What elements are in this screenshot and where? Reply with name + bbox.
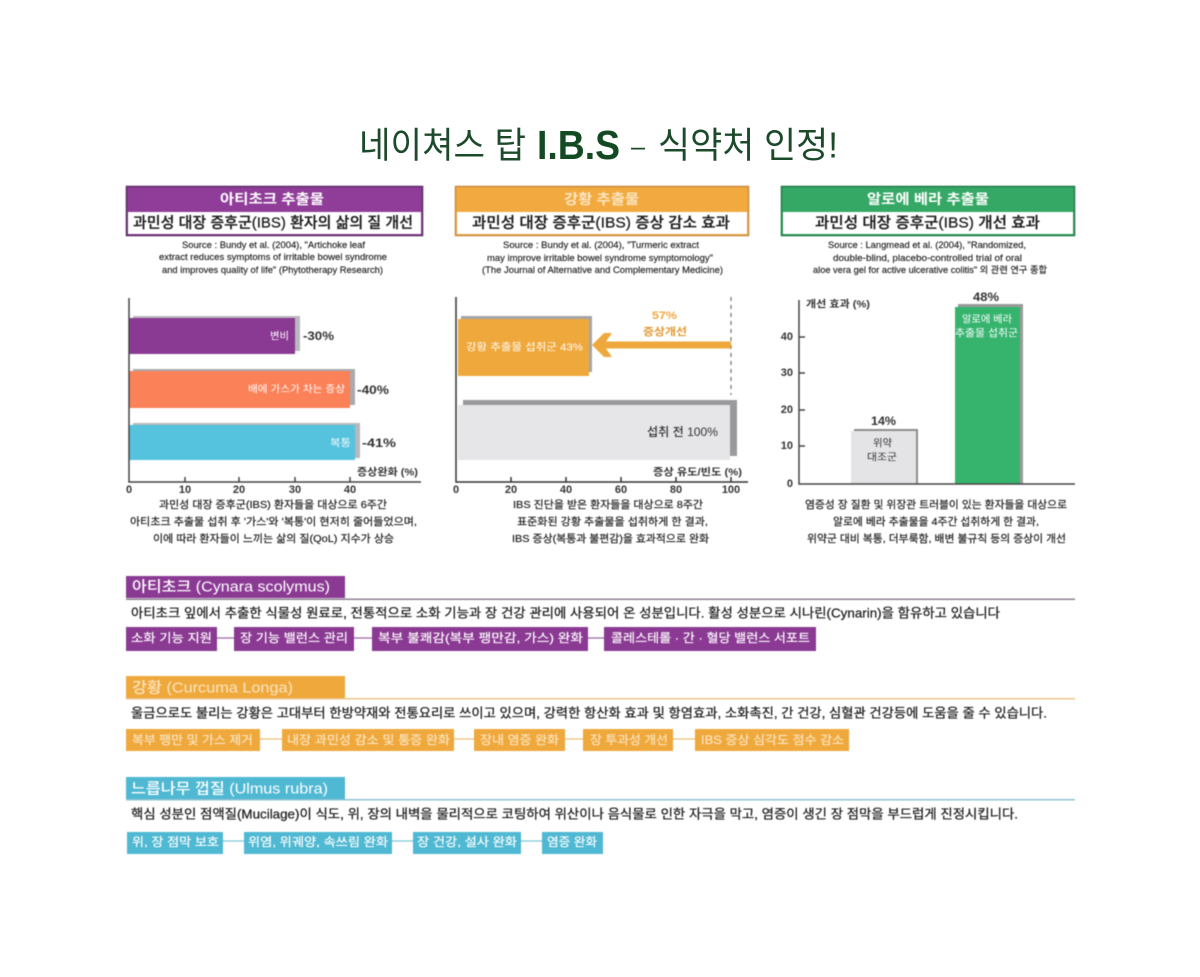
benefit tags: 장 건강, 설사 완화 bbox=[417, 835, 517, 849]
panel header: turmeric bbox=[456, 186, 748, 236]
chart caption: 이에 따라 환자들이 느끼는 삶의 질(QoL) 지수가 상승 bbox=[153, 533, 394, 545]
section heading: turmeric: 강황 (Curcuma Longa) bbox=[132, 680, 293, 696]
chart caption: 알로에 베라 추출물을 4주간 섭취하게 한 결과, bbox=[833, 515, 1039, 528]
benefit tags bbox=[126, 729, 849, 751]
source citation bbox=[159, 240, 387, 275]
bar chart: improvement effect: 0 bbox=[787, 478, 793, 490]
bar chart: symptom frequency: 40 bbox=[560, 484, 572, 496]
chart caption bbox=[805, 498, 1067, 545]
bar chart: symptom frequency: 증상 유도/빈도 (%) bbox=[653, 466, 742, 478]
bar chart: symptom frequency: 60 bbox=[615, 484, 627, 496]
bar chart: symptom frequency: 증상개선 bbox=[643, 325, 687, 338]
source citation: Source : Bundy et al. (2004), "Artichoke leaf bbox=[182, 240, 366, 250]
chart caption: IBS 증상(복통과 불편감)을 효과적으로 완화 bbox=[512, 532, 709, 545]
chart caption: 염증성 장 질환 및 위장관 트러블이 있는 환자들을 대상으로 bbox=[805, 498, 1067, 511]
panel: aloe vera study bbox=[781, 186, 1075, 545]
section heading: artichoke: 아티초크 (Cynara scolymus) bbox=[132, 578, 330, 596]
bar chart: improvement effect: 14% bbox=[871, 414, 896, 428]
panel: turmeric study bbox=[453, 186, 748, 545]
arrow: 57% reduction bbox=[592, 333, 731, 357]
benefit tags: 염증 완화 bbox=[547, 835, 597, 849]
bar chart: improvement effect: 위약 bbox=[873, 436, 892, 450]
bar chart: symptom relief: 30 bbox=[289, 484, 301, 496]
bar chart: symptom frequency: 강황 추출물 섭취군 43% bbox=[466, 342, 583, 354]
section heading: slippery elm: 느릅나무 껍질 (Ulmus rubra) bbox=[131, 780, 328, 798]
description: 핵심 성분인 점액질(Mucilage)이 식도, 위, 장의 내벽을 물리적으로 코팅하여 위산이나 음식물로 인한 자극을 막고, 염증이 생긴 장 점막을 부드럽게 진정시킵니다. bbox=[131, 806, 1018, 822]
benefit tags: 위염, 위궤양, 속쓰림 완화 bbox=[248, 835, 388, 849]
chart caption: 위약군 대비 복통, 더부룩함, 배변 불규칙 등의 증상이 개선 bbox=[807, 532, 1066, 545]
panel header: aloe vera: 과민성 대장 증후군(IBS) 개선 효과 bbox=[815, 214, 1040, 232]
chart caption: 과민성 대장 증후군(IBS) 환자들을 대상으로 6주간 bbox=[159, 499, 387, 511]
benefit tags bbox=[127, 832, 603, 854]
bar chart: symptom relief: -30% bbox=[303, 329, 334, 343]
section: slippery elm ingredient bbox=[126, 777, 1075, 854]
benefit tags: 복부 불쾌감(복부 팽만감, 가스) 완화 bbox=[378, 631, 583, 645]
chart caption: 아티초크 추출물 섭취 후 '가스'와 '복통'이 현저히 줄어들었으며, bbox=[130, 516, 417, 528]
bar chart: symptom relief: -41% bbox=[362, 436, 396, 450]
bar chart: symptom frequency: 80 bbox=[670, 484, 682, 496]
bar chart: improvement effect: 48% bbox=[973, 290, 999, 304]
title: I.B.S bbox=[537, 122, 620, 168]
bar chart: symptom relief: -40% bbox=[357, 383, 389, 397]
bar chart: symptom relief bbox=[126, 298, 421, 496]
bar chart: improvement effect: 40 bbox=[781, 331, 793, 343]
bar chart: symptom relief: 20 bbox=[233, 484, 245, 496]
chart caption bbox=[130, 499, 417, 545]
benefit tags: 위, 장 점막 보호 bbox=[132, 835, 219, 849]
panel header: artichoke: 과민성 대장 증후군(IBS) 환자의 삶의 질 개선 bbox=[133, 214, 413, 232]
title: 식약처 인정! bbox=[658, 124, 838, 166]
bar chart: improvement effect: 10 bbox=[781, 440, 793, 452]
source citation: extract reduces symptoms of irritable bowel syndrome bbox=[159, 252, 387, 262]
panel header: turmeric: 과민성 대장 증후군(IBS) 증상 감소 효과 bbox=[472, 214, 730, 232]
source citation: Source : Langmead et al. (2004), "Randomized, bbox=[828, 240, 1026, 250]
description: 아티초크 잎에서 추출한 식물성 원료로, 전통적으로 소화 기능과 장 건강 관리에 사용되어 온 성분입니다. 활성 성분으로 시나린(Cynarin)을 함유하고 있습니다 bbox=[131, 606, 1000, 620]
chart caption: 표준화된 강황 추출물을 섭취하게 한 결과, bbox=[517, 515, 708, 528]
source citation: Source : Bundy et al. (2004), "Turmeric extract bbox=[503, 240, 700, 250]
bar chart: improvement effect: 20 bbox=[781, 404, 793, 416]
panel header: artichoke: 아티초크 추출물 bbox=[220, 191, 324, 207]
title: 네이쳐스 탑 bbox=[359, 124, 526, 166]
section: turmeric ingredient bbox=[126, 676, 1075, 751]
bar chart: symptom relief: 배에 가스가 차는 증상 bbox=[248, 384, 345, 396]
source citation: may improve irritable bowel syndrome symptomology" bbox=[487, 253, 713, 263]
source citation: aloe vera gel for active ulcerative colitis" 외 관련 연구 종합 bbox=[813, 264, 1047, 275]
bar chart: symptom relief: 0 bbox=[126, 484, 132, 496]
chart caption bbox=[512, 499, 709, 545]
title: – bbox=[631, 131, 646, 161]
section: artichoke ingredient bbox=[126, 576, 1075, 651]
bar chart: symptom relief: 복통 bbox=[330, 438, 351, 450]
benefit tags: 장 기능 밸런스 관리 bbox=[240, 631, 348, 645]
panel header: artichoke bbox=[126, 186, 422, 236]
title bbox=[359, 122, 838, 168]
benefit tags: 소화 기능 지원 bbox=[131, 631, 212, 645]
bar chart: improvement effect: 개선 효과 (%) bbox=[806, 298, 870, 310]
panel header: aloe vera: 알로에 베라 추출물 bbox=[867, 191, 989, 207]
benefit tags: IBS 증상 심각도 점수 감소 bbox=[701, 733, 844, 747]
bar chart: symptom frequency bbox=[453, 297, 748, 496]
benefit tags: 복부 팽만 및 가스 제거 bbox=[132, 733, 253, 747]
bar chart: symptom relief: 변비 bbox=[270, 330, 289, 342]
benefit tags: 콜레스테롤 · 간 · 혈당 밸런스 서포트 bbox=[611, 631, 810, 645]
bar chart: improvement effect: 30 bbox=[781, 367, 793, 379]
panel: artichoke study bbox=[126, 186, 422, 545]
source citation bbox=[482, 240, 723, 275]
source citation bbox=[813, 240, 1047, 275]
panel header: turmeric: 강황 추출물 bbox=[564, 191, 639, 207]
bar chart: improvement effect bbox=[781, 290, 1075, 490]
bar chart: symptom relief: 10 bbox=[179, 484, 191, 496]
section heading: slippery elm bbox=[126, 777, 1075, 800]
benefit tags: 내장 과민성 감소 및 통증 완화 bbox=[287, 733, 450, 747]
section heading: turmeric bbox=[126, 676, 1075, 700]
section heading: artichoke bbox=[126, 576, 1075, 600]
description: 울금으로도 불리는 강황은 고대부터 한방약재와 전통요리로 쓰이고 있으며, 강력한 항산화 효과 및 항염효과, 소화촉진, 간 건강, 심혈관 건강등에 도움을 줄 수 있습니다. bbox=[131, 706, 1047, 720]
benefit tags bbox=[126, 627, 816, 651]
bar chart: symptom relief: 40 bbox=[344, 484, 356, 496]
chart caption: IBS 진단을 받은 환자들을 대상으로 8주간 bbox=[513, 499, 703, 511]
bar chart: improvement effect: 알로에 베라 bbox=[962, 314, 1012, 326]
panel header: aloe vera bbox=[782, 186, 1074, 236]
bar chart: symptom frequency: 0 bbox=[453, 484, 459, 496]
bar chart: improvement effect: 대조군 bbox=[867, 452, 897, 464]
bar chart: symptom relief: 증상완화 (%) bbox=[357, 466, 418, 478]
source citation: and improves quality of life" (Phytotherapy Research) bbox=[162, 265, 383, 275]
benefit tags: 장내 염증 완화 bbox=[480, 733, 559, 747]
source citation: (The Journal of Alternative and Complementary Medicine) bbox=[482, 265, 723, 275]
bar chart: symptom frequency: 57% bbox=[652, 310, 677, 322]
bar chart: improvement effect: 추출물 섭취군 bbox=[955, 328, 1018, 340]
bar chart: symptom frequency: 100 bbox=[722, 484, 740, 496]
bar chart: symptom frequency: 20 bbox=[505, 484, 517, 496]
source citation: double-blind, placebo-controlled trial of oral bbox=[833, 253, 1022, 263]
bar chart: symptom frequency: 섭취 전 100% bbox=[647, 425, 718, 439]
benefit tags: 장 투과성 개선 bbox=[590, 733, 668, 747]
